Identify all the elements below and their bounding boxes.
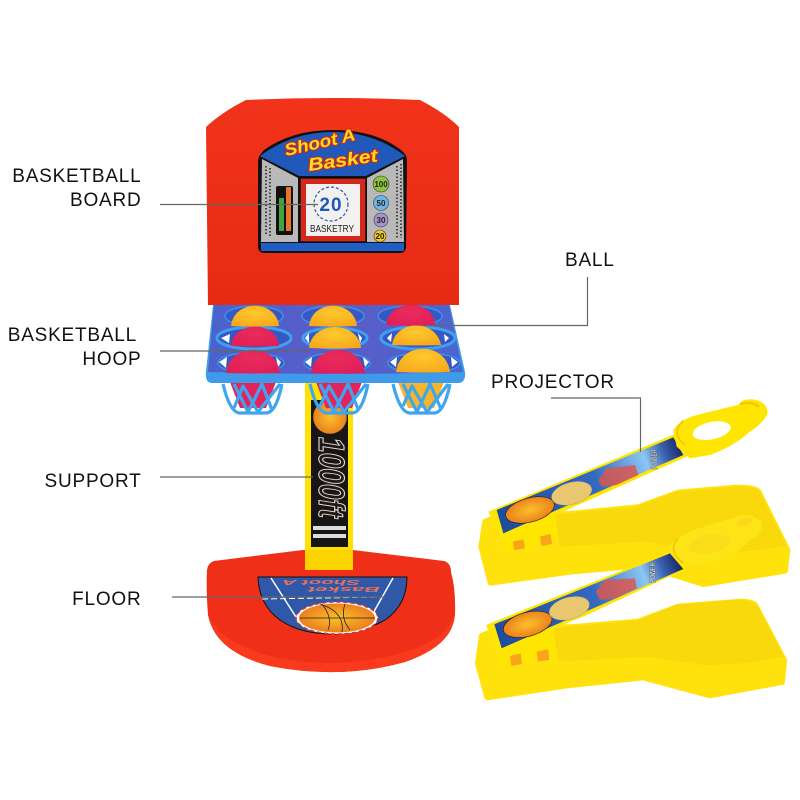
label: basketball board: BASKETBALL: [12, 166, 142, 187]
game base: floor: [207, 550, 455, 672]
leader: support: [160, 476, 313, 478]
arm: [488, 433, 690, 553]
score screen: [300, 178, 366, 242]
score badges: 30: [377, 216, 386, 225]
hoop plate: [206, 305, 465, 383]
power meter: [276, 186, 293, 235]
hoop baskets: [223, 382, 450, 413]
label: floor: FLOOR: [72, 589, 142, 610]
slots: [513, 534, 552, 550]
label: support: SUPPORT: [45, 471, 142, 492]
floor basketball: [296, 602, 378, 634]
logo text: Shoot A: [283, 125, 357, 160]
label: basketball board: [12, 166, 142, 211]
hole rings and balls: [217, 305, 460, 374]
logo text: [283, 125, 380, 175]
blue strip: [494, 553, 683, 648]
slots: [510, 649, 549, 666]
launcher ring: [670, 515, 762, 565]
blue strip: [497, 437, 683, 533]
score badges: 100: [374, 180, 388, 189]
backboard: [206, 98, 459, 305]
scoreboard panel: [258, 125, 407, 253]
leader: board: [160, 204, 318, 206]
pole basketball: [313, 400, 347, 434]
support pole: 1000ft: [311, 437, 352, 520]
ball: bottom row: [226, 349, 450, 374]
projector two: [478, 515, 784, 697]
floor decal: Shoot A: [282, 578, 360, 585]
label: basketball board: BOARD: [70, 190, 142, 211]
projector two: POWER: [647, 562, 657, 583]
score screen: BASKETRY: [310, 224, 354, 235]
label: ball: BALL: [565, 250, 615, 271]
projector base: [478, 602, 784, 697]
leader: floor: [172, 596, 385, 598]
arm: [486, 550, 687, 668]
projector base: [481, 488, 787, 584]
ball: top row: [231, 305, 435, 326]
floor decal: Basket: [306, 585, 380, 592]
label: basketball hoop: HOOP: [82, 349, 142, 370]
panel dots: [266, 164, 401, 238]
score badges: [373, 176, 389, 242]
score badges: 50: [377, 199, 386, 208]
projector one: [481, 399, 787, 584]
floor decal: [258, 577, 407, 634]
launcher ring: [673, 399, 768, 458]
label: basketball hoop: BASKETBALL: [8, 325, 137, 346]
score badges: 20: [376, 232, 385, 241]
leader: ball: [424, 277, 588, 326]
score screen: 20: [319, 195, 343, 216]
ball: middle row: [231, 326, 441, 348]
label: projector: PROJECTOR: [491, 372, 615, 393]
white slivers: [219, 333, 458, 368]
leader: hoop: [160, 350, 310, 352]
projector one: POWER: [649, 449, 659, 469]
support pole: [305, 383, 353, 570]
logo text: Basket: [307, 145, 380, 175]
leader: projector: [551, 398, 640, 452]
label: basketball hoop: [8, 325, 142, 370]
